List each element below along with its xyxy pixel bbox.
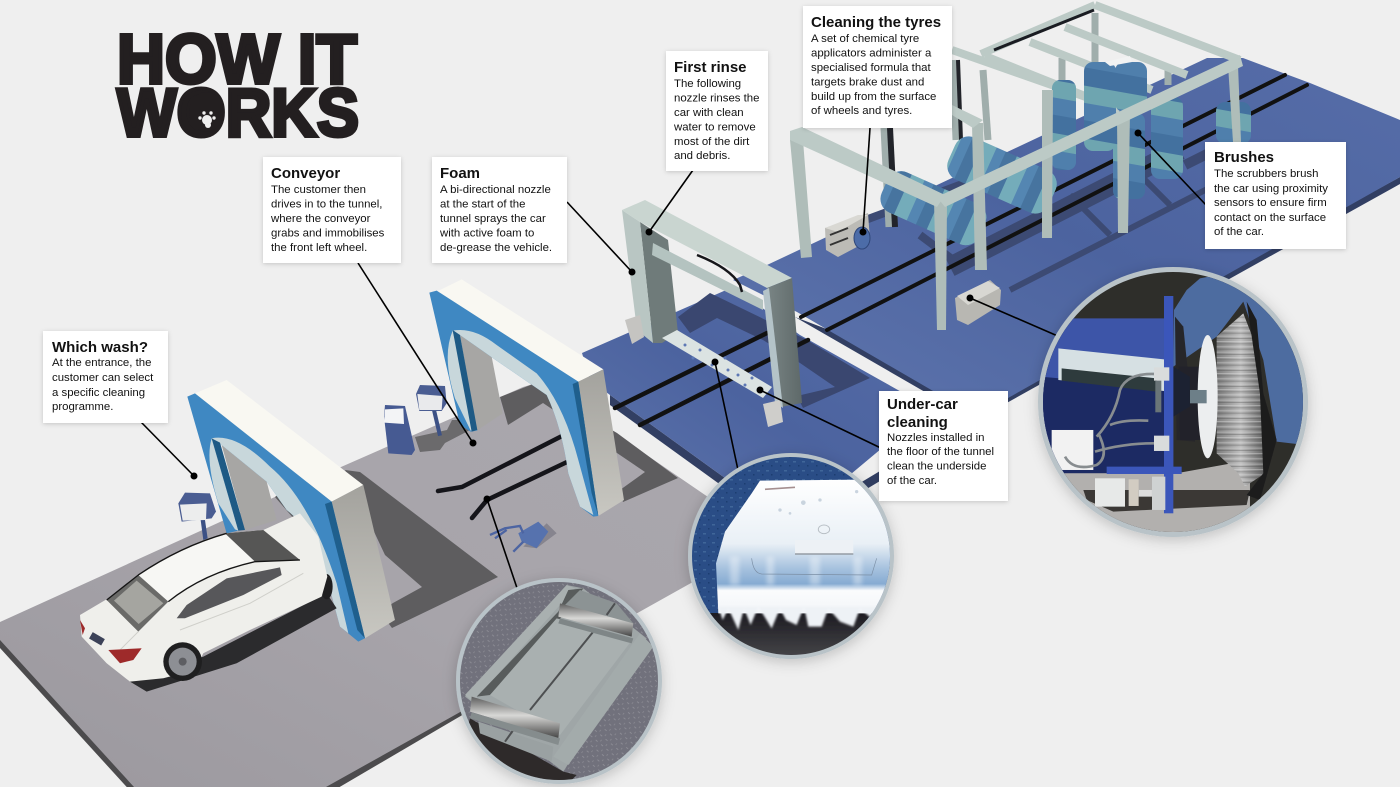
callout: conveyor: [263, 157, 401, 263]
icon: gear in logo: [198, 111, 216, 128]
callout: first rinse: nozzle rinses the: [674, 92, 759, 104]
callout: foam: at the start of the: [440, 198, 525, 210]
inset: conveyor rollers: [450, 575, 670, 787]
logo: How It Works: WORKS: [117, 75, 359, 151]
callout: foam: Foam: [440, 165, 480, 182]
logo: How It Works: [117, 20, 359, 151]
floor: blue tunnel first section: [582, 287, 930, 535]
leader lines: [141, 128, 1206, 588]
callout: under-car cleaning: the floor of the tunnel: [887, 446, 994, 458]
arch: foam tunnel entrance: [429, 279, 624, 517]
callout: brushes: contact on the surface: [1214, 212, 1326, 224]
callout: under-car cleaning: cleaning: [887, 414, 948, 431]
callout: which wash: programme.: [52, 401, 113, 413]
floor: entrance area: [0, 382, 740, 787]
callout: under-car cleaning: Under-car: [887, 396, 958, 413]
callout: foam: with active foam to: [439, 228, 534, 240]
callout: brushes: of the car.: [1214, 226, 1264, 238]
small conveyor machine: [490, 522, 557, 552]
callout: foam: de-grease the vehicle.: [440, 242, 552, 254]
payment kiosk and sign: [384, 385, 447, 455]
callout: which wash: [43, 331, 168, 423]
callout: under-car cleaning: Nozzles installed in: [887, 432, 984, 444]
callout: brushes: Brushes: [1214, 149, 1274, 166]
entrance selection sign: [178, 493, 216, 540]
rear roof beams: [952, 5, 1240, 110]
callout: under-car cleaning: of the car.: [887, 475, 937, 487]
callout: brushes: the car using proximity: [1214, 183, 1328, 195]
callout: first rinse: First rinse: [674, 59, 747, 76]
callout: first rinse: and debris.: [674, 150, 730, 162]
tyre applicator box: [825, 213, 870, 257]
callout: cleaning the tyres: Cleaning the tyres: [811, 14, 941, 31]
vertical brushes: [1052, 80, 1076, 170]
brush sensor box: [955, 280, 1001, 325]
callout: cleaning the tyres: specialised formula that: [811, 62, 931, 74]
callout: first rinse: The following: [674, 78, 741, 90]
rinse arch: [622, 200, 802, 427]
callout: cleaning the tyres: [803, 6, 952, 128]
callout: brushes: The scrubbers brush: [1214, 168, 1318, 180]
floor: blue tunnel second section: [733, 58, 1400, 415]
callout: conveyor: Conveyor: [271, 165, 340, 182]
callout: which wash: a specific cleaning: [52, 387, 145, 399]
inset: foam on car: [680, 450, 900, 663]
callout: first rinse: water to remove: [673, 122, 756, 134]
gantry frame with brushes: [790, 5, 1251, 330]
callout: first rinse: [666, 51, 768, 171]
arch: entrance: [187, 380, 395, 642]
callout: cleaning the tyres: applicators administer a: [811, 48, 932, 60]
callout: cleaning the tyres: of wheels and tyres.: [811, 105, 912, 117]
callout: cleaning the tyres: build up from the surface: [811, 91, 936, 103]
conveyor rails on entrance floor: [438, 436, 567, 518]
callout: under-car cleaning: clean the underside: [887, 460, 986, 472]
inset: tyre applicator brush: [1030, 260, 1320, 545]
callout: brushes: sensors to ensure firm: [1214, 197, 1327, 209]
logo: How It Works: HOW IT: [117, 20, 357, 98]
front roof beams: [790, 55, 1243, 207]
callout: conveyor: drives in to the tunnel,: [271, 198, 382, 210]
callout: conveyor: where the conveyor: [270, 213, 371, 225]
callout: foam: A bi-directional nozzle: [440, 184, 551, 196]
callout: foam: tunnel sprays the car: [440, 213, 546, 225]
callout: foam: [432, 157, 567, 263]
callout: conveyor: The customer then: [271, 184, 366, 196]
callout: cleaning the tyres: A set of chemical tyre: [811, 33, 919, 45]
callout: which wash: At the entrance, the: [52, 357, 151, 369]
horizontal brushes: [942, 132, 1062, 218]
callout: under-car cleaning: [879, 391, 1008, 501]
front posts: [790, 65, 1241, 330]
callout: first rinse: most of the dirt: [674, 136, 750, 148]
callout: brushes: [1205, 142, 1346, 249]
callout: conveyor: grabs and immobilises: [271, 228, 385, 240]
callout: first rinse: car with clean: [674, 107, 744, 119]
car: [80, 513, 337, 692]
callout: which wash: customer can select: [52, 372, 154, 384]
callout: cleaning the tyres: targets brake dust and: [811, 76, 924, 88]
callout: which wash: Which wash?: [52, 339, 148, 356]
rear posts: [884, 13, 1168, 227]
callout: conveyor: the front left wheel.: [271, 242, 367, 254]
